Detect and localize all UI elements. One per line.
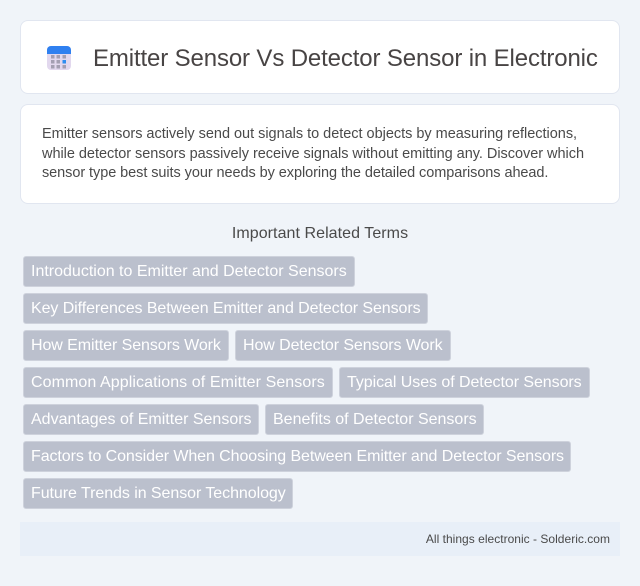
- intro text: while detector sensors passively receive signals without emitting any. Discover which: [42, 146, 584, 162]
- chip group: related terms: [23, 256, 590, 509]
- chip: [265, 404, 484, 435]
- chip: How Emitter Sensors Work: [31, 337, 221, 354]
- header panel: [20, 20, 620, 94]
- chip: [23, 441, 571, 472]
- intro panel: [20, 104, 620, 204]
- footer bar: [20, 522, 620, 556]
- chip: Typical Uses of Detector Sensors: [347, 374, 582, 391]
- footer text: All things electronic - Solderic.com: [426, 532, 610, 546]
- heading: related terms: Important Related Terms: [232, 225, 408, 242]
- chip: [339, 367, 590, 398]
- chip: Advantages of Emitter Sensors: [31, 411, 252, 428]
- chip: Future Trends in Sensor Technology: [31, 485, 286, 502]
- chip: Key Differences Between Emitter and Detector Sensors: [31, 300, 421, 317]
- intro text: Emitter sensors actively send out signals to detect objects by measuring reflections,: [42, 126, 577, 142]
- chip: Benefits of Detector Sensors: [273, 411, 477, 428]
- chip: [235, 330, 451, 361]
- intro text: sensor type best suits your needs by exploring the detailed comparisons ahead.: [42, 165, 548, 181]
- chip: Common Applications of Emitter Sensors: [31, 374, 325, 391]
- chip: Introduction to Emitter and Detector Sensors: [31, 263, 347, 280]
- chip: [23, 367, 333, 398]
- chip: Factors to Consider When Choosing Between Emitter and Detector Sensors: [31, 448, 564, 465]
- icon: calendar: [47, 46, 71, 70]
- chip: [23, 404, 259, 435]
- title: Emitter Sensor Vs Detector Sensor in Electronic: [93, 45, 598, 72]
- chip: [23, 478, 293, 509]
- chip: [23, 256, 355, 287]
- intro text: [42, 126, 584, 181]
- chip: [23, 330, 229, 361]
- chip: How Detector Sensors Work: [243, 337, 443, 354]
- chip: [23, 293, 428, 324]
